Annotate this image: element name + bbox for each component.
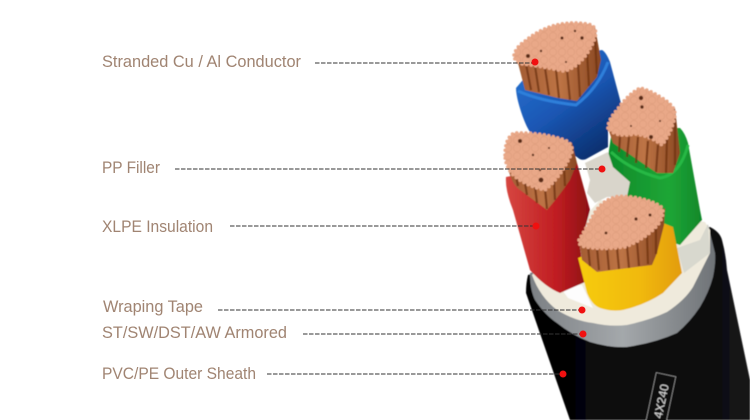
label: Stranded Cu / Al Conductor <box>102 52 538 71</box>
label: ST/SW/DST/AW Armored: ST/SW/DST/AW Armored <box>102 323 287 342</box>
blue conductor <box>514 23 601 101</box>
PP filler <box>585 152 630 203</box>
red conductor <box>505 133 577 210</box>
yellow conductor <box>579 196 665 272</box>
label: PVC/PE Outer Sheath <box>102 364 566 383</box>
label: Stranded Cu / Al Conductor: Stranded Cu / Al Conductor <box>102 52 301 71</box>
label: Wraping Tape: Wraping Tape <box>103 297 203 316</box>
sheath print: 4X240 <box>645 373 676 420</box>
sheath print: 4X240: 4X240 <box>651 383 672 420</box>
yellow core <box>578 196 682 311</box>
green conductor <box>608 88 680 173</box>
green core <box>608 88 702 245</box>
label: Wraping Tape <box>103 297 586 316</box>
label: ST/SW/DST/AW Armored <box>102 323 586 342</box>
outer black sheath <box>526 227 750 420</box>
label: XLPE Insulation: XLPE Insulation <box>102 217 213 236</box>
label: PVC/PE Outer Sheath: PVC/PE Outer Sheath <box>102 364 256 383</box>
wrapping tape <box>532 200 710 326</box>
armor layer <box>530 225 715 347</box>
label: XLPE Insulation <box>102 217 540 236</box>
label: PP Filler: PP Filler <box>102 158 160 177</box>
label: PP Filler <box>102 158 606 177</box>
white tape fibres <box>558 224 710 308</box>
blue core <box>514 23 622 160</box>
red core <box>505 133 590 293</box>
cable photo illustration <box>505 23 750 420</box>
